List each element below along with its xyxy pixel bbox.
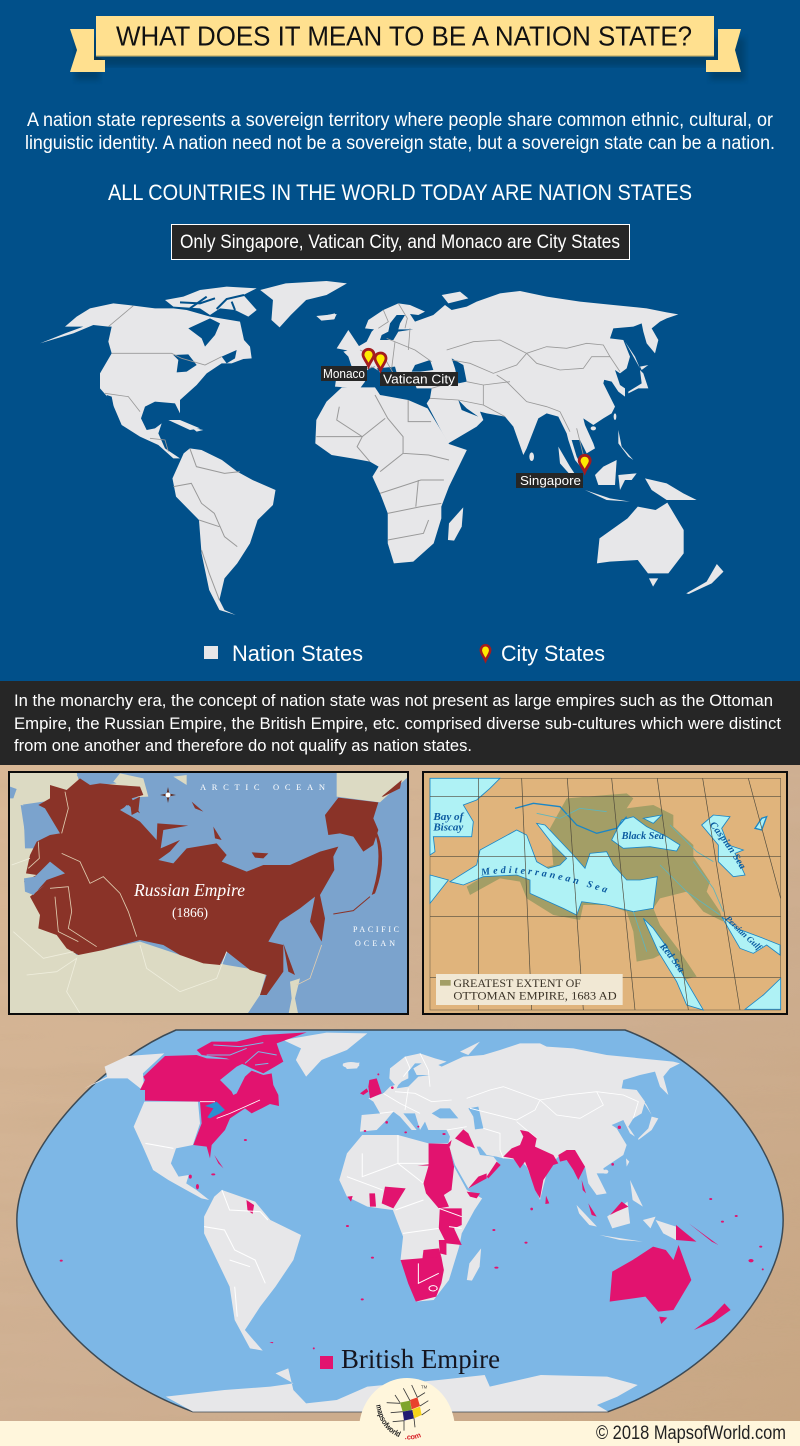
title banner — [70, 16, 745, 80]
sea labels: Black Sea — [621, 831, 664, 842]
logo: MapsofWorld: mapsofworld — [376, 1404, 401, 1437]
sea labels: Mediterranean Sea — [482, 866, 608, 893]
wood background — [0, 765, 800, 1425]
arctic channels — [207, 1043, 277, 1065]
logo: MapsofWorld: .com — [405, 1434, 421, 1440]
tan inner map — [430, 778, 781, 1010]
subheading: ALL COUNTRIES IN THE WORLD TODAY ARE NATION STATES — [108, 180, 692, 205]
St Lawrence border — [200, 1100, 260, 1118]
sea labels — [433, 812, 763, 973]
logo: MapsofWorld — [360, 1378, 454, 1440]
dark text band: Empire, the Russian Empire, the British Empire, etc. comprised diverse sub-cultures which were distinct — [14, 714, 781, 733]
panel: British Empire world map — [17, 1030, 783, 1412]
legend: city states: City States — [501, 641, 605, 666]
logo: MapsofWorld: TM — [421, 1384, 428, 1389]
legend: British Empire: British Empire — [341, 1344, 500, 1374]
pin: Singapore — [579, 455, 590, 472]
white borders of Asia — [380, 1053, 638, 1158]
empire — [24, 778, 402, 995]
sea labels: Red Sea — [659, 943, 684, 973]
map label: Singapore: Singapore — [520, 473, 581, 488]
panel: Russian Empire map — [8, 772, 408, 1015]
dark text band: from one another and therefore do not qualify as nation states. — [14, 736, 472, 755]
small pink islands — [60, 1139, 764, 1349]
blue background panel — [0, 0, 800, 682]
label: Arctic Ocean: ARCTIC OCEAN — [200, 782, 325, 792]
pin: Vatican City — [375, 353, 386, 370]
dark text band: In the monarchy era, the concept of nation state was not present as large empires such as the Ottoman — [14, 691, 773, 710]
inland seas — [397, 1063, 483, 1129]
seas in Europe — [10, 775, 116, 830]
intro text: A nation state represents a sovereign territory where people share common ethnic, cultural, or — [27, 110, 774, 131]
grid — [430, 778, 781, 1010]
legend: nation states: Nation States — [232, 641, 363, 666]
dark text band — [0, 681, 800, 765]
sea inlets — [24, 797, 147, 895]
world map: nation states — [40, 281, 723, 615]
intro text — [25, 110, 775, 154]
grey land — [84, 1033, 676, 1412]
sea labels: Caspian Sea — [710, 822, 745, 870]
map label: Vatican City: Vatican City — [383, 372, 456, 386]
label: Russian Empire: (1866) — [172, 906, 208, 921]
white borders — [145, 1135, 462, 1317]
label: Russian Empire: Russian Empire — [133, 880, 245, 900]
city states callout box: Only Singapore, Vatican City, and Monaco are City States — [180, 232, 620, 253]
pink Asia and West Africa — [347, 1073, 628, 1217]
panel: Ottoman Empire map — [424, 773, 786, 1013]
land — [8, 772, 408, 1015]
seas — [430, 778, 781, 1010]
city states callout box — [172, 224, 630, 260]
pink territories — [214, 1143, 731, 1343]
greenland, south america, africa, oceania — [172, 281, 723, 615]
intro text: linguistic identity. A nation need not be a sovereign state, but a sovereign state can be a nation. — [25, 133, 775, 154]
ottoman legend: OTTOMAN EMPIRE, 1683 AD — [453, 989, 617, 1003]
eurasia — [320, 291, 697, 502]
ottoman legend: GREATEST EXTENT OF — [453, 976, 581, 990]
rivers — [515, 803, 767, 833]
map label: Monaco: Monaco — [323, 366, 365, 381]
sea labels: Biscay — [432, 823, 464, 834]
great lakes — [205, 1102, 225, 1118]
title banner: WHAT DOES IT MEAN TO BE A NATION STATE? — [116, 20, 692, 52]
ottoman legend — [436, 974, 623, 1005]
north america — [40, 287, 257, 458]
footer bar — [0, 1421, 800, 1446]
map ocean — [17, 1030, 783, 1412]
Ottoman map frame — [423, 772, 787, 1014]
sea labels: Persian Gulf — [725, 916, 763, 951]
label: Pacific Ocean: PACIFIC — [353, 925, 399, 934]
label: Pacific Ocean: OCEAN — [355, 939, 395, 948]
label: Russian Empire — [134, 884, 245, 920]
Canada and American colonies — [140, 1032, 307, 1158]
Russian map frame — [9, 772, 408, 1014]
eurasia land — [360, 1043, 680, 1200]
compass — [160, 787, 176, 803]
pin: Monaco — [363, 349, 374, 366]
label: Pacific Ocean — [353, 926, 398, 946]
sea labels: Bay of — [432, 812, 465, 823]
borders — [28, 792, 322, 985]
Eurasia and Indian Ocean territories — [343, 1042, 680, 1217]
ottoman territory — [467, 793, 723, 982]
